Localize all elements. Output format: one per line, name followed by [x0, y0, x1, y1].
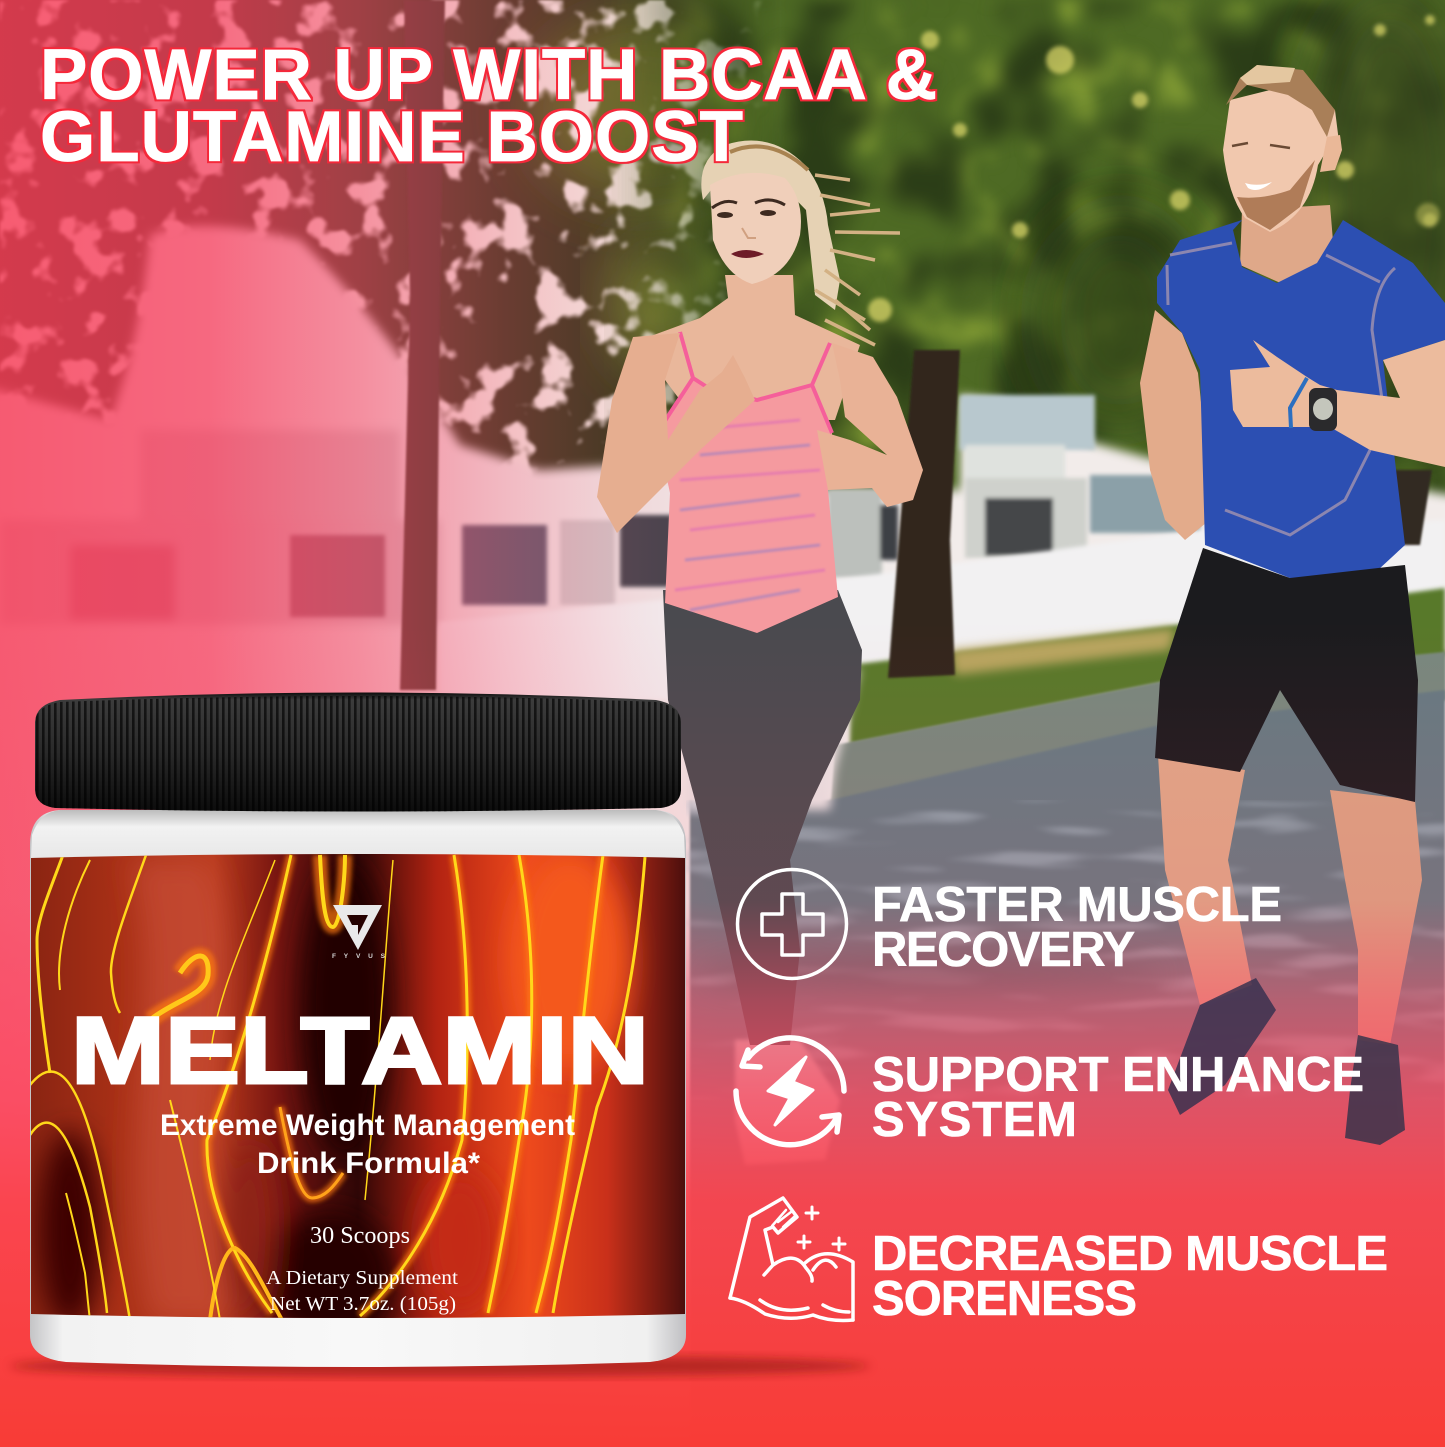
woman far leg and shoe [735, 1040, 840, 1165]
man head [1223, 65, 1342, 232]
park ground [442, 527, 1445, 1223]
label swirl lines [30, 855, 645, 1320]
icon: energy bolt with refresh arrows [736, 1038, 844, 1145]
label serving details: 30 Scoops [310, 1223, 410, 1249]
benefit text: decreased muscle soreness [872, 1227, 1388, 1326]
benefit text: support enhance system [872, 1048, 1364, 1147]
benefit text: support enhance system: SUPPORT ENHANCE [872, 1048, 1364, 1102]
label subtitle [160, 1109, 575, 1180]
benefit text: decreased muscle soreness: SORENESS [872, 1272, 1137, 1326]
woman neck and chest [640, 275, 860, 420]
woman left arm and hand [597, 333, 755, 533]
man neck [1240, 205, 1335, 285]
icon: flexed muscle arm [730, 1198, 853, 1320]
man front leg [1158, 755, 1252, 1005]
benefit text: faster muscle recovery [872, 878, 1282, 977]
icon: medical cross in circle [738, 870, 846, 978]
benefit text: support enhance system: SYSTEM [872, 1093, 1077, 1147]
headline: POWER UP WITH BCAA & [40, 36, 937, 115]
color overlay: bottom red fade [0, 620, 1445, 1447]
tree trunks [400, 0, 1432, 690]
label brand name: MELTAMIN [71, 998, 649, 1104]
benefit text: decreased muscle soreness: DECREASED MUSCLE [872, 1227, 1388, 1281]
man arm right and hand [1230, 340, 1445, 467]
woman face [710, 173, 801, 284]
jar shoulder shading [31, 810, 685, 858]
jar body [30, 810, 686, 1367]
jar shadow [10, 1355, 870, 1377]
label logo [332, 905, 386, 960]
label swirl glow [150, 855, 603, 1316]
label serving details: Net WT 3.7oz. (105g) [270, 1293, 456, 1315]
right tree foliage [600, 0, 1445, 510]
man shirt [1157, 220, 1445, 582]
park buildings and fences [290, 395, 1200, 617]
man back leg [1330, 790, 1422, 1045]
headline [40, 36, 937, 177]
benefit text: faster muscle recovery: FASTER MUSCLE [872, 878, 1282, 932]
man watch [1309, 388, 1337, 431]
jar lid [35, 692, 681, 812]
left tree foliage [0, 0, 780, 480]
jar label artwork [30, 850, 686, 1350]
man bracelet [1290, 378, 1307, 428]
man shorts [1155, 548, 1418, 802]
runner: man [1140, 65, 1445, 1045]
woman top [657, 332, 838, 633]
woman hair [701, 140, 900, 345]
headline: GLUTAMINE BOOST [40, 98, 743, 177]
label serving details: A Dietary Supplement [266, 1267, 458, 1289]
label logo: FYVUS [332, 953, 386, 960]
man shoes [1168, 978, 1405, 1145]
label subtitle: Extreme Weight Management [160, 1109, 575, 1142]
man arm left [1140, 310, 1222, 540]
color overlay: left pink fade [0, 0, 720, 1447]
product jar [10, 692, 870, 1377]
benefit text: faster muscle recovery: RECOVERY [872, 923, 1135, 977]
label serving details [266, 1223, 458, 1315]
label subtitle: Drink Formula* [257, 1147, 480, 1180]
woman leggings [663, 590, 862, 1045]
woman right arm and hand [817, 343, 923, 507]
runner: woman [597, 140, 923, 1165]
